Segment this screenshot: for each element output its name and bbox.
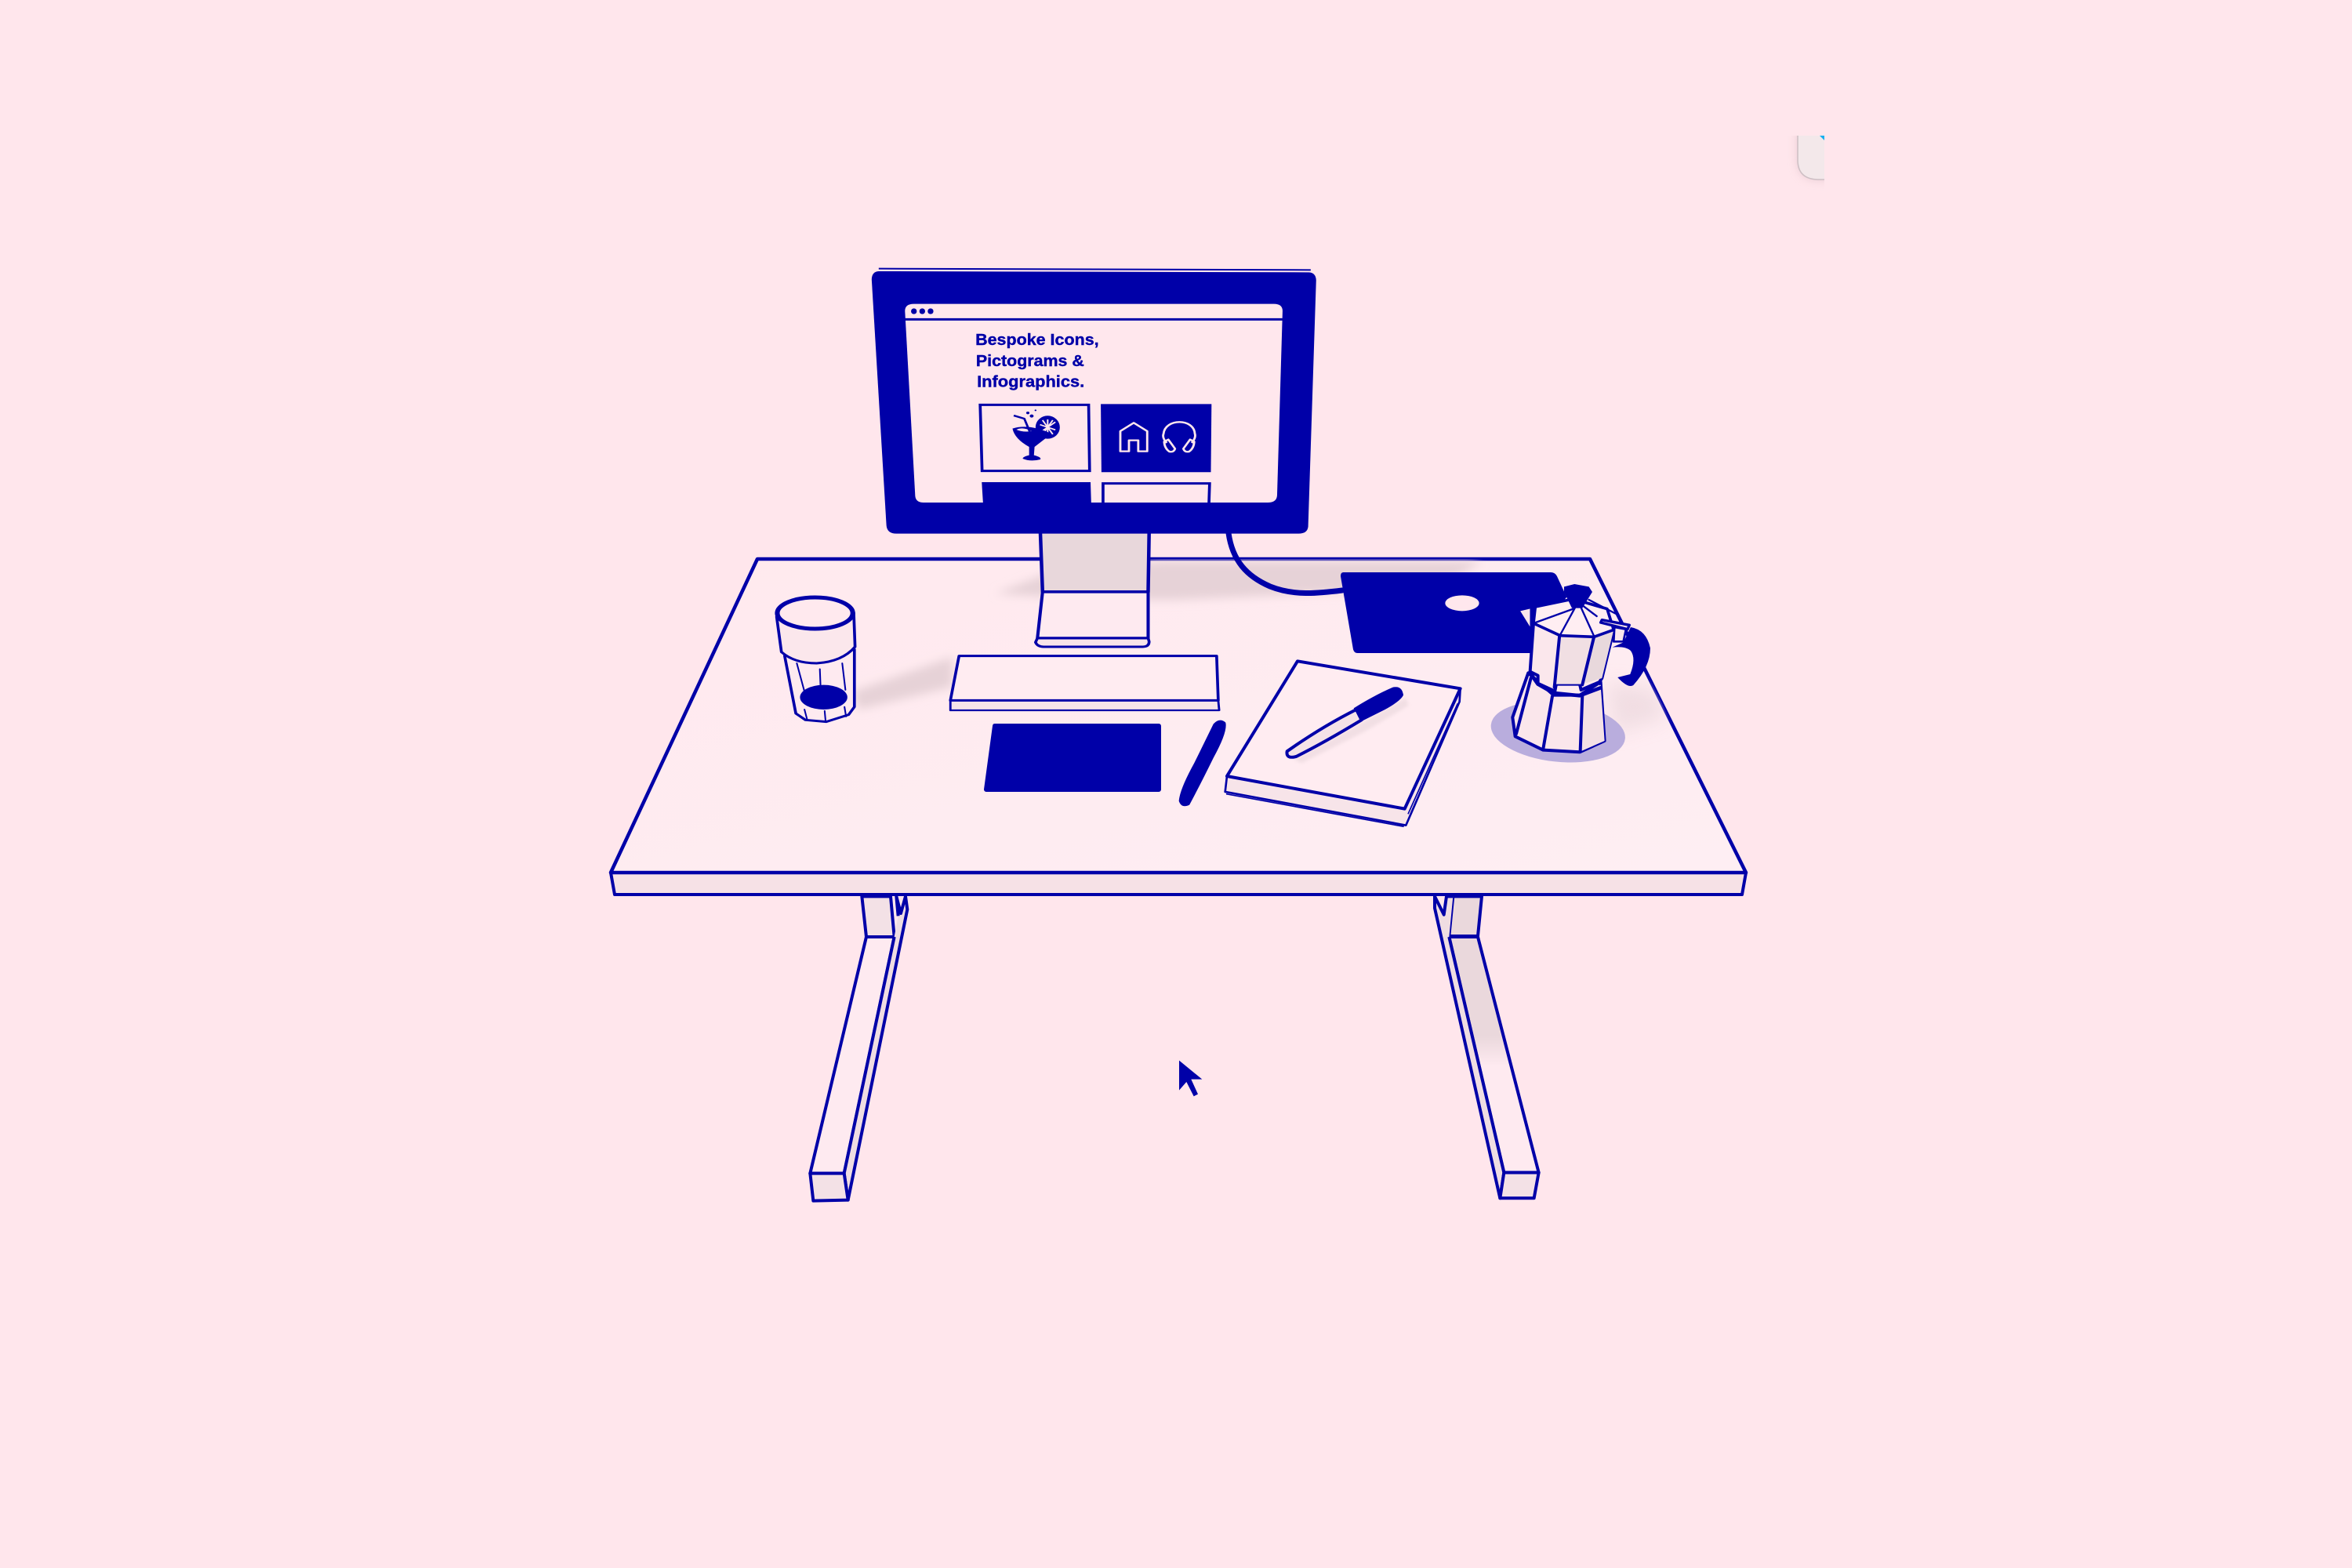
notebook cover	[1227, 661, 1461, 809]
moka lower body	[1512, 673, 1605, 752]
clipped window corner	[1795, 136, 1824, 182]
glass liquid	[800, 685, 848, 710]
mouse cursor	[1179, 1061, 1202, 1096]
screen heading: Infographics.	[977, 372, 1084, 390]
moka spout	[1519, 608, 1531, 630]
glass rim	[777, 597, 853, 629]
icon: house	[1120, 423, 1147, 452]
icon: cocktail	[1012, 409, 1060, 460]
browser bar line	[905, 316, 1283, 323]
browser window	[905, 304, 1283, 503]
stylus	[1179, 720, 1226, 806]
cast shadows on desk	[853, 561, 1666, 733]
moka handle	[1601, 620, 1650, 686]
pen	[1287, 687, 1403, 757]
left desk leg	[810, 896, 907, 1201]
icon: headphones	[1163, 422, 1195, 452]
keyboard	[950, 656, 1219, 710]
glass lower body	[785, 649, 855, 722]
card: cocktail	[980, 405, 1090, 471]
notebook side	[1225, 688, 1461, 826]
card: outline lower	[1103, 484, 1210, 503]
moka lid	[1534, 599, 1617, 637]
desk front edge	[611, 873, 1746, 895]
monitor stand	[1036, 532, 1149, 647]
monitor top rim	[879, 269, 1311, 270]
moka pot	[1488, 584, 1650, 768]
card: filled lower	[982, 482, 1091, 503]
desk top	[611, 559, 1746, 895]
moka knob	[1564, 584, 1592, 608]
glass sleeve	[777, 613, 855, 663]
moka upper body	[1530, 623, 1613, 695]
moka coaster	[1488, 695, 1628, 768]
notebook	[1225, 661, 1461, 826]
screen heading: Pictograms &	[976, 351, 1084, 369]
tablet	[986, 726, 1159, 789]
monitor bezel	[872, 271, 1316, 534]
desk surface	[611, 559, 1746, 873]
right desk leg	[1435, 896, 1539, 1198]
screen heading	[975, 330, 1099, 390]
browser dots	[911, 308, 934, 314]
monitor cable	[1229, 533, 1342, 593]
glass	[777, 597, 855, 722]
monitor	[872, 269, 1316, 647]
laptop	[1341, 572, 1566, 653]
laptop logo	[1445, 595, 1479, 611]
card: house and headphones	[1101, 404, 1211, 472]
pen shadow	[1294, 698, 1409, 763]
glass facets	[797, 663, 846, 721]
screen	[905, 304, 1283, 503]
screen heading: Bespoke Icons,	[975, 330, 1099, 348]
